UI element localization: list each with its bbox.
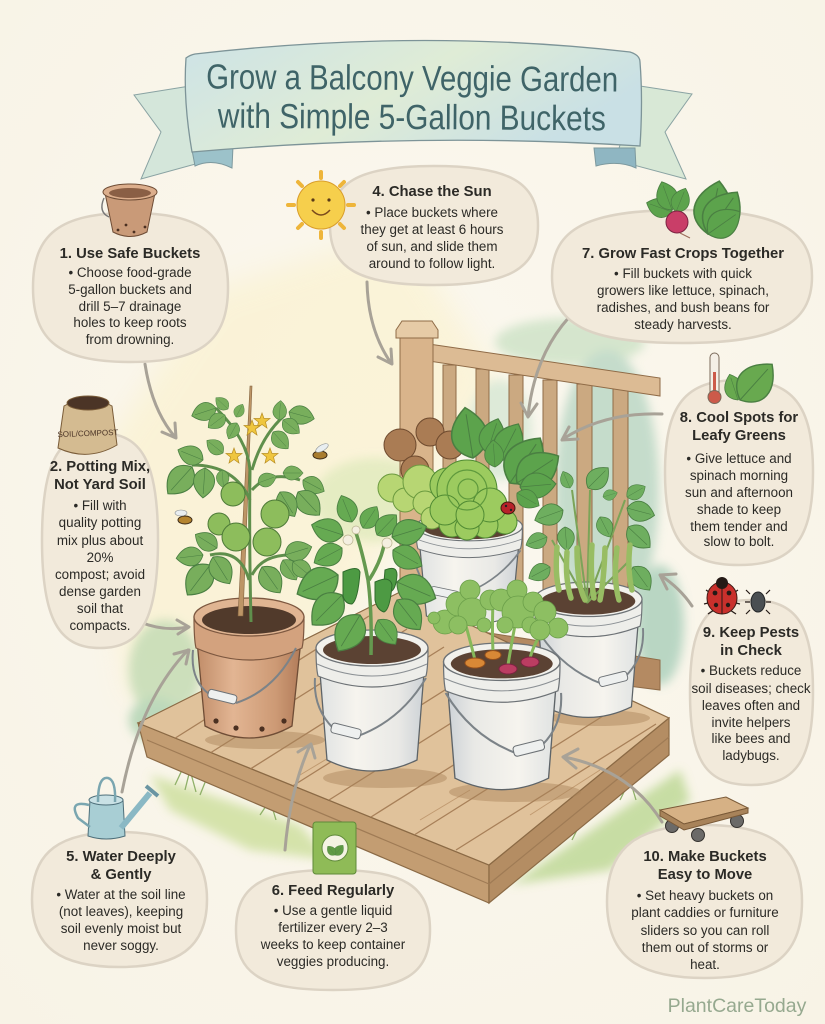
grass washes under deck xyxy=(150,770,690,885)
card 8: leafy greens: shade to keep xyxy=(697,502,781,517)
card 8: leafy greens: Leafy Greens xyxy=(692,428,786,444)
card 8: leafy greens xyxy=(665,380,813,565)
card 1: use safe buckets: 1. Use Safe Buckets xyxy=(60,246,200,262)
card 9: pests: soil diseases; check xyxy=(691,681,811,696)
card 9: pests: 9. Keep Pests xyxy=(703,625,799,641)
card 4: chase the sun: around to follow light. xyxy=(369,256,495,271)
card 2: potting mix: mix plus about xyxy=(57,533,143,548)
title text: with Simple 5-Gallon Buckets xyxy=(217,97,606,138)
card 7: fast crops: • Fill buckets with quick xyxy=(614,266,752,281)
card 2: potting mix: 2. Potting Mix, xyxy=(50,459,150,475)
deck xyxy=(138,592,669,903)
lettuce bucket xyxy=(415,512,522,625)
card 10: caddy: sliders so you can roll xyxy=(641,923,769,938)
card 2: potting mix: soil that xyxy=(77,601,123,616)
card 6: feed xyxy=(236,870,430,990)
card 8: leafy greens: them tender and xyxy=(690,519,788,534)
arrows to the bucket garden xyxy=(122,282,692,850)
card 10: caddy: • Set heavy buckets on xyxy=(637,888,773,903)
card 1: use safe buckets: from drowning. xyxy=(86,332,174,347)
card 9: pests: like bees and xyxy=(712,731,790,746)
card 2: potting mix: quality potting xyxy=(59,515,141,530)
card 9: pests: • Buckets reduce xyxy=(701,663,801,678)
card 9: pests: ladybugs. xyxy=(722,748,780,763)
icon: fertilizer bag xyxy=(313,822,356,874)
card 5: water xyxy=(32,832,207,967)
card 7: fast crops: 7. Grow Fast Crops Together xyxy=(582,246,784,262)
icon: watering can xyxy=(75,778,158,839)
ladybug on lettuce xyxy=(501,502,515,514)
background foliage xyxy=(129,318,690,885)
card 6: feed: weeks to keep container xyxy=(260,937,406,952)
card 2: potting mix: compacts. xyxy=(69,618,131,633)
card 9: pests: leaves often and xyxy=(702,698,800,713)
card 8: leafy greens: sun and afternoon xyxy=(685,485,793,500)
carrots and radishes xyxy=(428,580,568,674)
card 2: potting mix: compost; avoid xyxy=(55,567,145,582)
card 2: potting mix xyxy=(42,433,158,648)
card 8: leafy greens: spinach morning xyxy=(690,468,788,483)
railing xyxy=(396,321,660,690)
icon: plant caddy xyxy=(660,797,748,842)
card 10: caddy: 10. Make Buckets xyxy=(643,849,767,865)
card 9: pests: invite helpers xyxy=(712,715,791,730)
icon: ladybug and beetle xyxy=(704,577,771,614)
icon: compost sack: SOIL/COMPOST xyxy=(57,428,119,439)
card 5: water: 5. Water Deeply xyxy=(66,849,177,865)
card 4: chase the sun xyxy=(330,166,538,285)
card 9: pests: in Check xyxy=(720,643,783,659)
card 5: water: soil evenly moist but xyxy=(61,921,182,936)
card 7: fast crops: radishes, and bush beans for xyxy=(597,300,770,315)
card 7: fast crops: growers like lettuce, spinach, xyxy=(597,283,769,298)
card 4: chase the sun: they get at least 6 hours xyxy=(361,222,504,237)
card 6: feed: veggies producing. xyxy=(277,954,389,969)
card 1: use safe buckets xyxy=(33,213,228,362)
lettuce and spinach xyxy=(378,405,568,540)
card 10: caddy xyxy=(607,825,802,978)
card 2: potting mix: Not Yard Soil xyxy=(54,477,146,493)
bush bean plant xyxy=(523,461,658,603)
card 8: leafy greens: 8. Cool Spots for xyxy=(680,410,798,426)
title banner xyxy=(134,40,692,179)
bees xyxy=(175,442,330,524)
card 2: potting mix: • Fill with xyxy=(73,498,127,513)
card 2: potting mix: 20% xyxy=(87,550,113,565)
card 1: use safe buckets: 5-gallon buckets and xyxy=(68,282,192,297)
pepper bucket xyxy=(315,630,428,771)
card 1: use safe buckets: drill 5–7 drainage xyxy=(79,299,181,314)
card 4: chase the sun: of sun, and slide them xyxy=(366,239,498,254)
card 9: pests xyxy=(690,600,813,785)
card 10: caddy: them out of storms or xyxy=(642,940,769,955)
card 5: water: never soggy. xyxy=(83,938,159,953)
card 4: chase the sun: • Place buckets where xyxy=(366,205,498,220)
card 7: fast crops xyxy=(552,210,812,343)
tomato plant xyxy=(159,386,328,622)
card 5: water: (not leaves), keeping xyxy=(59,904,183,919)
card 5: water: & Gently xyxy=(91,867,152,883)
card 1: use safe buckets: • Choose food-grade xyxy=(68,265,192,280)
card 6: feed: 6. Feed Regularly xyxy=(272,883,395,899)
icon: terracotta bucket xyxy=(102,184,157,236)
icon: radish and spinach xyxy=(643,177,752,245)
card 10: caddy: heat. xyxy=(690,957,720,972)
pepper plant xyxy=(291,492,441,659)
card 10: caddy: Easy to Move xyxy=(658,867,752,883)
icon: thermometer and leaf xyxy=(708,353,785,411)
card 8: leafy greens: • Give lettuce and xyxy=(686,451,792,466)
card 8: leafy greens: slow to bolt. xyxy=(704,534,774,549)
card 1: use safe buckets: holes to keep roots xyxy=(73,315,187,330)
card 5: water: • Water at the soil line xyxy=(56,887,186,902)
bush beans bucket xyxy=(534,582,643,717)
title text xyxy=(206,58,618,138)
card 7: fast crops: steady harvests. xyxy=(634,317,732,332)
terracotta bucket with drainage holes xyxy=(193,598,304,738)
card 2: potting mix: dense garden xyxy=(59,584,141,599)
icon: compost sack xyxy=(57,396,119,454)
icon: smiling sun xyxy=(288,172,354,238)
card 10: caddy: plant caddies or furniture xyxy=(631,905,779,920)
title text: Grow a Balcony Veggie Garden xyxy=(206,58,618,99)
card 6: feed: fertilizer every 2–3 xyxy=(278,920,388,935)
card 6: feed: • Use a gentle liquid xyxy=(274,903,392,918)
root vegetable bucket xyxy=(444,643,561,790)
card 4: chase the sun: 4. Chase the Sun xyxy=(372,184,492,200)
logo text: PlantCareToday xyxy=(668,995,807,1017)
